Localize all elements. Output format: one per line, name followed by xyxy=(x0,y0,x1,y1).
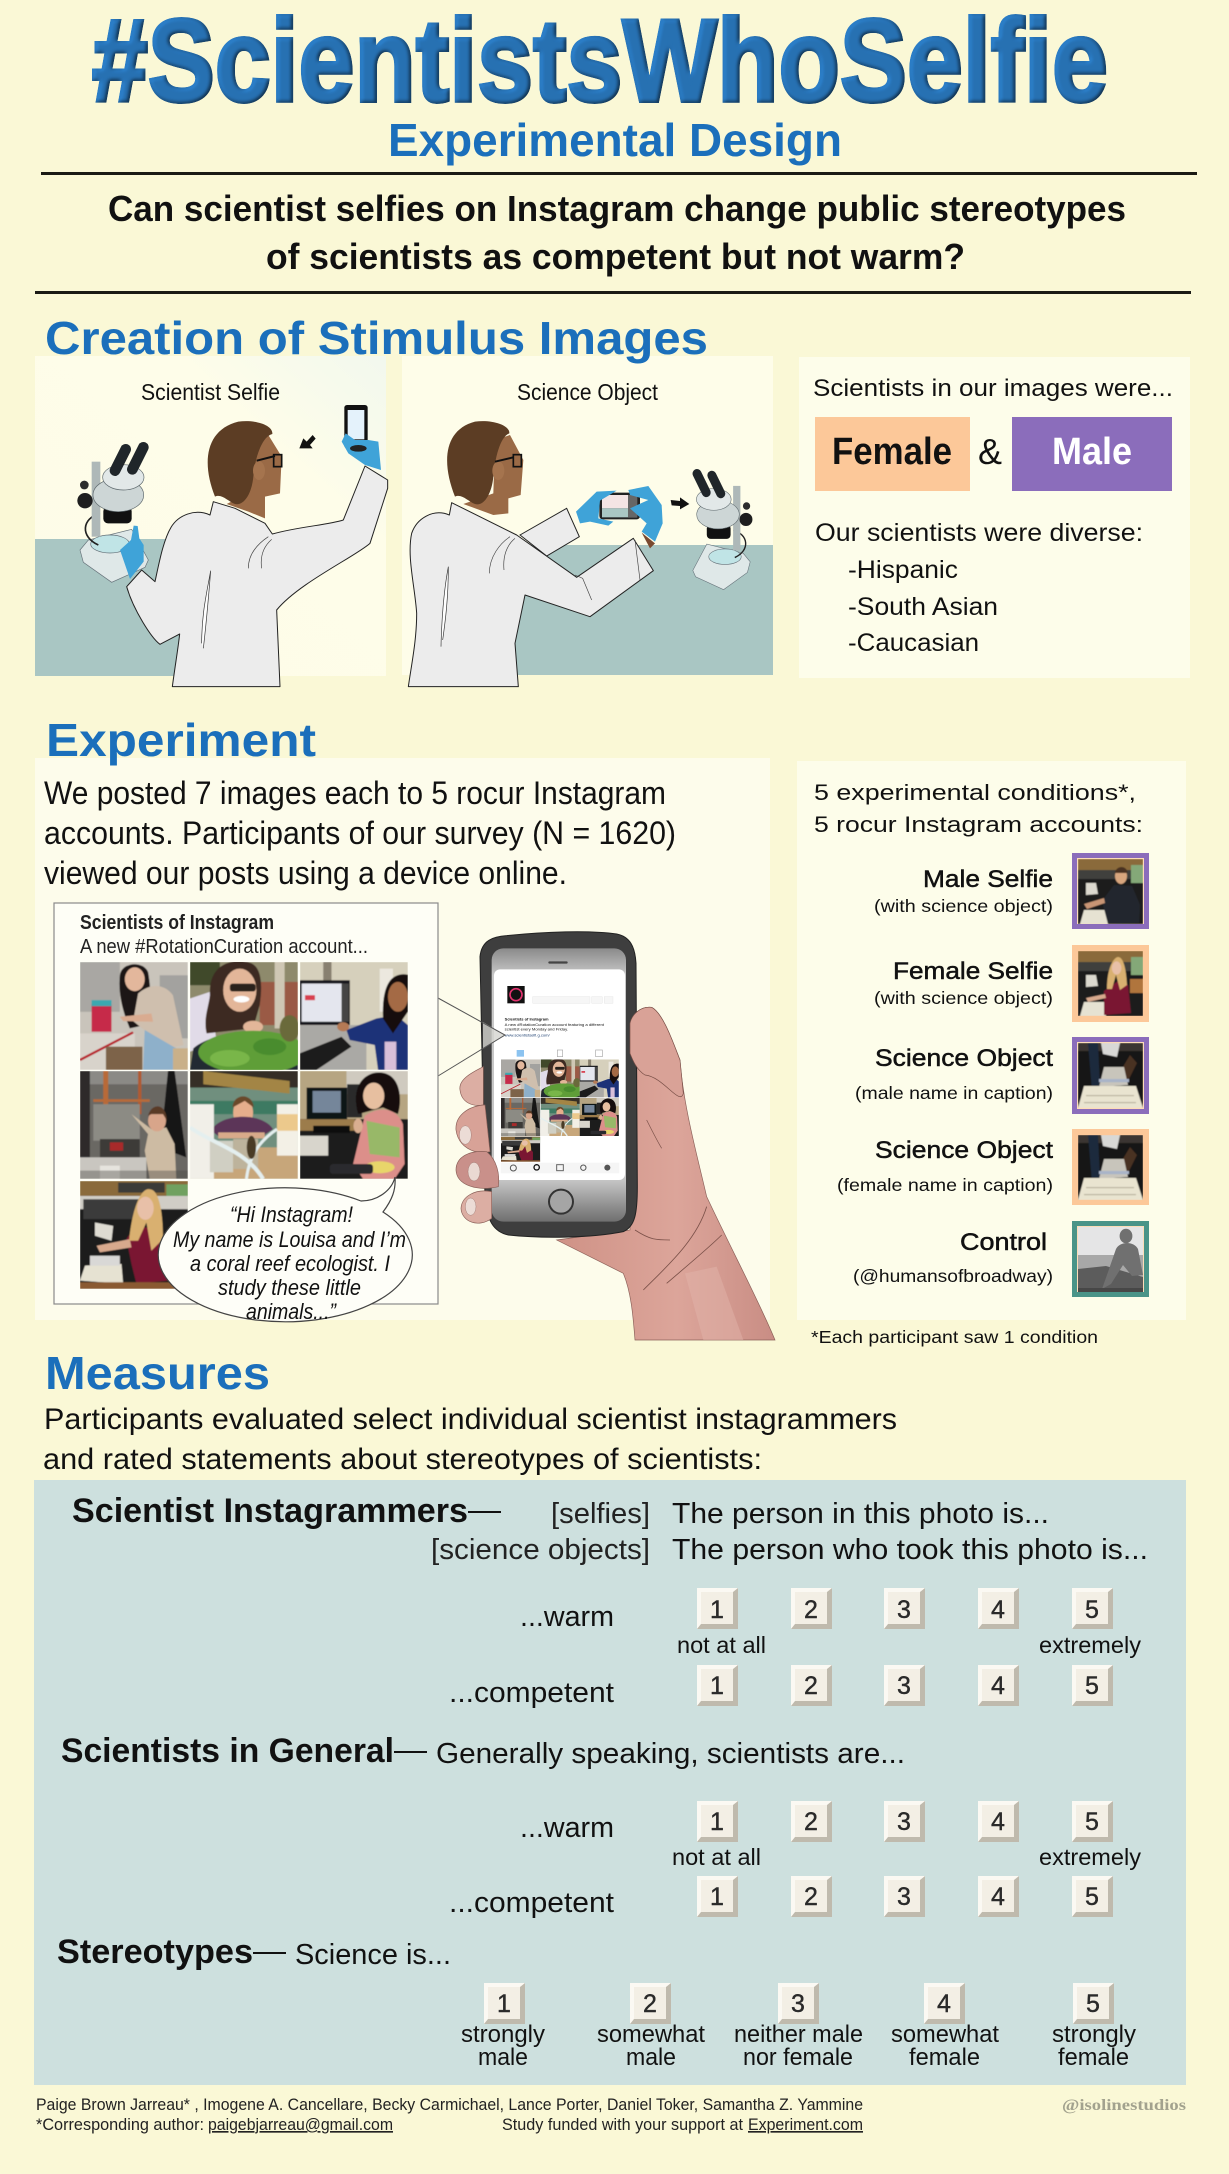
heading: measures: Measures xyxy=(45,1347,270,1399)
panel: measures xyxy=(34,1480,1186,2085)
footer: credits: *Corresponding author: xyxy=(36,2116,204,2134)
text: experiment description xyxy=(44,775,676,891)
rating: instagrammers warm: 5 xyxy=(1085,1596,1099,1624)
heading: creation of stimulus images: Creation of Stimulus Images xyxy=(45,312,708,364)
rating: stereotypes scale: somewhat xyxy=(891,2021,999,2048)
rating: stereotypes scale: strongly xyxy=(1052,2021,1136,2048)
watermark: @isolinestudios xyxy=(1062,2097,1186,2114)
rating: instagrammers competent: 2 xyxy=(804,1672,818,1700)
rating: general warm: not at all xyxy=(672,1844,761,1870)
heading: experiment: Experiment xyxy=(46,714,316,766)
condition: male selfie: Male Selfie xyxy=(923,866,1053,893)
speech bubble: a coral reef ecologist. I xyxy=(190,1251,390,1276)
condition: control: (@humansofbroadway) xyxy=(853,1266,1053,1286)
condition: female selfie: Female Selfie xyxy=(893,958,1053,985)
label: female: Female xyxy=(832,431,952,473)
rating: stereotypes scale: 4 xyxy=(937,1990,951,2018)
speech bubble: My name is Louisa and I’m xyxy=(173,1227,406,1252)
speech bubble: animals...” xyxy=(246,1299,337,1324)
label: science object: Science Object xyxy=(517,379,659,405)
text: diversity list: -Hispanic xyxy=(848,556,958,584)
rating: instagrammers competent: ...competent xyxy=(449,1677,614,1709)
text: experiment description: viewed our posts using a device online. xyxy=(44,855,567,891)
condition: male selfie: (with science object) xyxy=(874,896,1053,916)
rating: general warm: 5 xyxy=(1085,1808,1099,1836)
heading: stereotypes: Stereotypes xyxy=(57,1933,253,1971)
rating: stereotypes scale: 5 xyxy=(1086,1990,1100,2018)
footer: credits: paigebjarreau@gmail.com xyxy=(208,2116,393,2134)
panel: scientist gender and diversity xyxy=(799,357,1190,678)
illustration: scientist photographing microscope xyxy=(408,421,752,687)
prompts: The person in this photo is... xyxy=(672,1498,1049,1530)
heading: stereotypes: Science is... xyxy=(295,1939,451,1971)
condition: female selfie xyxy=(874,945,1149,1022)
rating: general warm: 3 xyxy=(897,1808,911,1836)
rating: instagrammers warm: not at all xyxy=(677,1632,766,1658)
panel: experimental conditions xyxy=(797,761,1186,1320)
rating: instagrammers warm: 1 xyxy=(710,1596,724,1624)
rating: instagrammers warm: extremely xyxy=(1039,1632,1142,1658)
rating: general warm: ...warm xyxy=(520,1812,614,1844)
research question: Can scientist selfies on Instagram change public stereotypes xyxy=(108,188,1126,229)
heading: conditions xyxy=(814,780,1143,837)
label: male: Male xyxy=(1052,431,1132,473)
research question xyxy=(108,188,1126,277)
condition: science object male: (male name in caption) xyxy=(855,1083,1053,1103)
rating: stereotypes scale: neither male xyxy=(734,2021,863,2048)
heading: conditions: 5 experimental conditions*, xyxy=(814,780,1136,805)
rating: instagrammers warm: 2 xyxy=(804,1596,818,1624)
text: diversity list: -Caucasian xyxy=(848,629,979,657)
prompts: [science objects] xyxy=(431,1534,650,1566)
text: diversity list: -South Asian xyxy=(848,593,998,621)
rating: stereotypes scale xyxy=(461,1983,1136,2071)
text: experiment description: We posted 7 images each to 5 rocur Instagram xyxy=(44,775,666,811)
callout: zoom lines from phone xyxy=(438,998,505,1076)
panel: scientist selfie xyxy=(35,356,388,687)
rating: stereotypes scale: nor female xyxy=(743,2044,853,2071)
rating: general warm: extremely xyxy=(1039,1844,1142,1870)
rating: general warm: 4 xyxy=(991,1808,1005,1836)
rating: instagrammers warm: 3 xyxy=(897,1596,911,1624)
hand holding phone: Scientists of Instagram xyxy=(505,1017,549,1022)
rating: general competent: 2 xyxy=(804,1883,818,1911)
rating: instagrammers competent: 5 xyxy=(1085,1672,1099,1700)
rating: stereotypes scale: female xyxy=(1058,2044,1129,2071)
condition: control: Control xyxy=(960,1229,1047,1256)
text: measures description: and rated statements about stereotypes of scientists: xyxy=(43,1443,762,1476)
rating: general warm: 2 xyxy=(804,1808,818,1836)
rating: general competent: 5 xyxy=(1085,1883,1099,1911)
rating: stereotypes scale: somewhat xyxy=(597,2021,705,2048)
rating: stereotypes scale: 2 xyxy=(643,1990,657,2018)
panel: science object xyxy=(402,356,773,687)
condition: science object female xyxy=(837,1129,1149,1205)
label: male xyxy=(1012,417,1172,491)
hand holding phone: A new #RotationCuration account featuring a different xyxy=(505,1023,604,1027)
subtitle: Experimental Design xyxy=(388,114,842,166)
instagram profile enlargement xyxy=(54,903,438,1304)
text: diversity list: Our scientists were diverse: xyxy=(815,519,1143,547)
hand holding phone: scientist every Monday and Friday. xyxy=(505,1028,568,1032)
label: female xyxy=(815,417,970,491)
condition: science object female: Science Object xyxy=(875,1137,1053,1164)
panel: experiment xyxy=(35,758,775,1340)
rating: stereotypes scale: male xyxy=(626,2044,676,2071)
condition: female selfie: (with science object) xyxy=(874,988,1053,1008)
hand holding phone xyxy=(456,932,775,1340)
text: measures description: Participants evaluated select individual scientist instagrammers xyxy=(44,1403,897,1436)
condition: science object male xyxy=(855,1037,1149,1114)
rating: stereotypes scale: 1 xyxy=(497,1990,511,2018)
text: experiment description: accounts. Participants of our survey (N = 1620) xyxy=(44,815,676,851)
prompts: The person who took this photo is... xyxy=(672,1534,1148,1566)
rating: instagrammers warm: ...warm xyxy=(520,1601,614,1633)
rating: stereotypes scale: female xyxy=(909,2044,980,2071)
footer: credits: Paige Brown Jarreau* , Imogene A. Cancellare, Becky Carmichael, Lance Porter, Daniel Toker, Samantha Z. Yammine xyxy=(36,2096,863,2114)
rating: stereotypes scale: strongly xyxy=(461,2021,545,2048)
illustration: scientist taking selfie xyxy=(77,405,388,687)
heading: scientists in general: Scientists in General xyxy=(61,1732,394,1770)
account bio: A new #RotationCuration account... xyxy=(80,936,368,958)
speech bubble: study these little xyxy=(218,1275,361,1300)
rating: general competent: 4 xyxy=(991,1883,1005,1911)
rating: general competent: ...competent xyxy=(449,1887,614,1919)
rating: general competent: 1 xyxy=(710,1883,724,1911)
speech bubble: “Hi Instagram! xyxy=(230,1202,353,1227)
rating: instagrammers competent: 3 xyxy=(897,1672,911,1700)
rating: stereotypes scale: male xyxy=(478,2044,528,2071)
heading: stereotypes xyxy=(57,1933,451,1971)
photo grid xyxy=(80,961,408,1289)
condition: science object female: (female name in caption) xyxy=(837,1175,1053,1195)
rating: stereotypes scale: 3 xyxy=(791,1990,805,2018)
prompts: [selfies] xyxy=(551,1498,650,1530)
rating: instagrammers competent: 1 xyxy=(710,1672,724,1700)
account name: Scientists of Instagram xyxy=(80,912,274,934)
footer: credits: Experiment.com xyxy=(748,2116,863,2134)
label: scientist selfie: Scientist Selfie xyxy=(141,379,280,405)
text: diversity list xyxy=(815,519,1143,657)
rating: general competent xyxy=(449,1876,1113,1919)
speech bubble xyxy=(158,1177,412,1324)
ampersand: & xyxy=(978,431,1002,472)
heading: scientists in general: Generally speaking, scientists are... xyxy=(436,1738,905,1770)
heading: scientists in general xyxy=(61,1732,905,1770)
research question: of scientists as competent but not warm? xyxy=(266,236,965,277)
condition: control xyxy=(853,1221,1149,1297)
prompts xyxy=(431,1498,1148,1566)
text: scientists were: Scientists in our images were... xyxy=(813,375,1173,402)
footer: credits: Study funded with your support at xyxy=(502,2116,743,2134)
heading: conditions: 5 rocur Instagram accounts: xyxy=(814,812,1143,837)
rating: instagrammers warm xyxy=(520,1588,1142,1658)
rating: general competent: 3 xyxy=(897,1883,911,1911)
hand holding phone: www.scientistselfi.g.com/ xyxy=(505,1033,551,1037)
text: measures description xyxy=(43,1403,897,1476)
heading: scientist instagrammers: Scientist Instagrammers xyxy=(72,1492,468,1530)
condition: science object male: Science Object xyxy=(875,1045,1053,1072)
condition: male selfie xyxy=(874,853,1149,929)
rating: instagrammers competent: 4 xyxy=(991,1672,1005,1700)
footer: credits xyxy=(36,2096,863,2134)
footnote: each participant: *Each participant saw 1 condition xyxy=(811,1327,1098,1347)
rating: instagrammers competent xyxy=(449,1665,1113,1709)
rating: instagrammers warm: 4 xyxy=(991,1596,1005,1624)
rating: general warm xyxy=(520,1801,1142,1870)
rating: general warm: 1 xyxy=(710,1808,724,1836)
